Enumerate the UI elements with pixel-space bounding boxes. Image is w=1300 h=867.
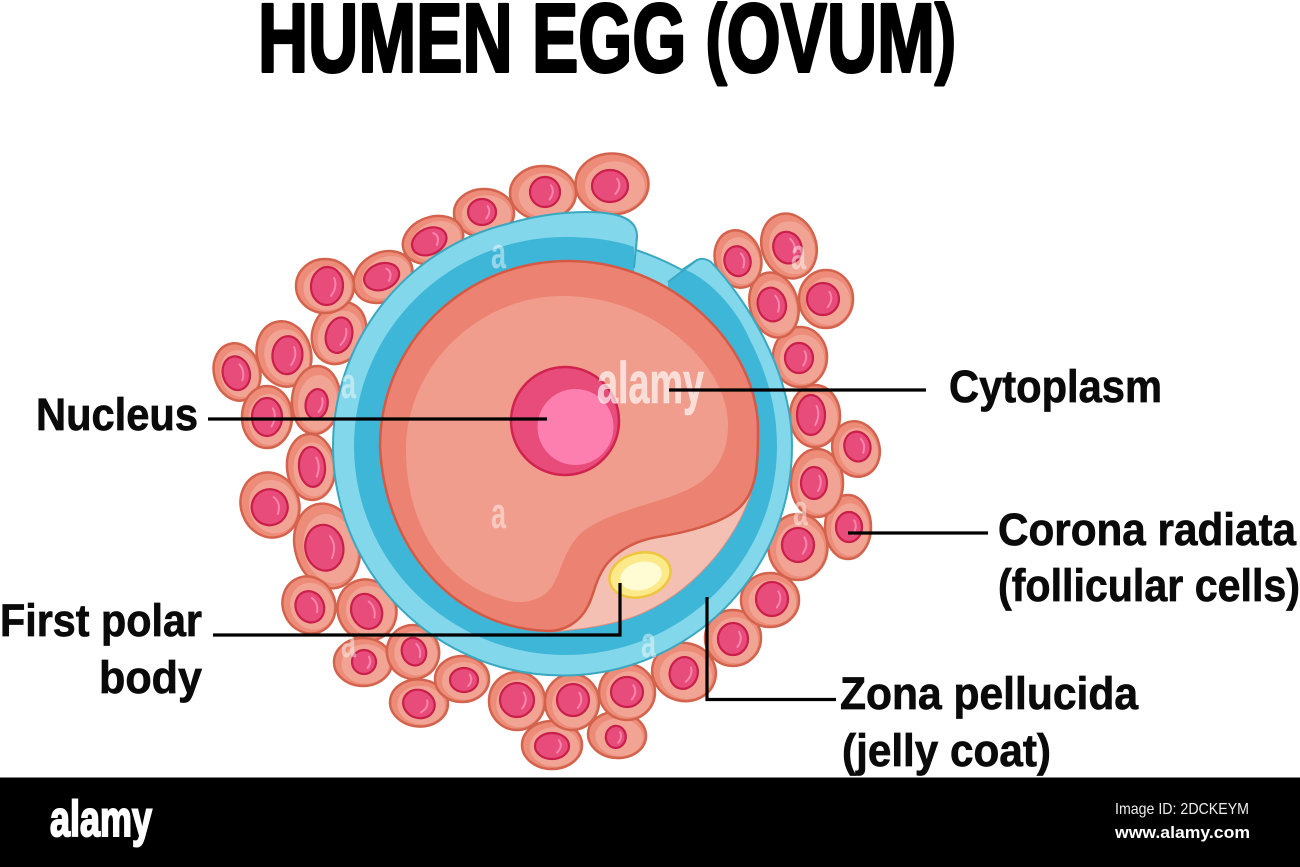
label: zona pellucida <box>840 668 1139 776</box>
label: corona radiata <box>998 504 1300 611</box>
zona pellucida <box>333 212 792 676</box>
label: first polar body: body <box>99 652 202 703</box>
perivitelline space <box>550 490 752 632</box>
alamy logo: alamy <box>50 791 152 847</box>
watermark: a <box>491 489 506 538</box>
follicular cells cluster <box>207 154 886 769</box>
label: zona pellucida: (jelly coat) <box>842 725 1051 776</box>
label: nucleus: Nucleus <box>36 389 198 440</box>
cytoplasm <box>380 261 758 631</box>
nucleus <box>511 367 619 475</box>
label: zona pellucida: Zona pellucida <box>840 668 1139 719</box>
watermark: a <box>793 486 808 535</box>
watermark: a <box>641 618 656 667</box>
watermark: a <box>341 359 356 408</box>
label: cytoplasm: Cytoplasm <box>949 361 1162 412</box>
first polar body <box>605 546 675 604</box>
label: first polar body: First polar <box>0 595 202 646</box>
label: first polar body <box>0 595 202 703</box>
watermark: a <box>791 230 806 279</box>
watermark: alamy <box>597 351 704 416</box>
watermark: a <box>341 618 356 667</box>
watermark: a <box>491 229 506 278</box>
leader lines <box>208 390 988 700</box>
footer bar <box>0 778 1300 867</box>
watermark <box>341 229 808 667</box>
website: www.alamy.com <box>1114 823 1250 842</box>
image id: Image ID: 2DCKEYM <box>1115 801 1249 818</box>
